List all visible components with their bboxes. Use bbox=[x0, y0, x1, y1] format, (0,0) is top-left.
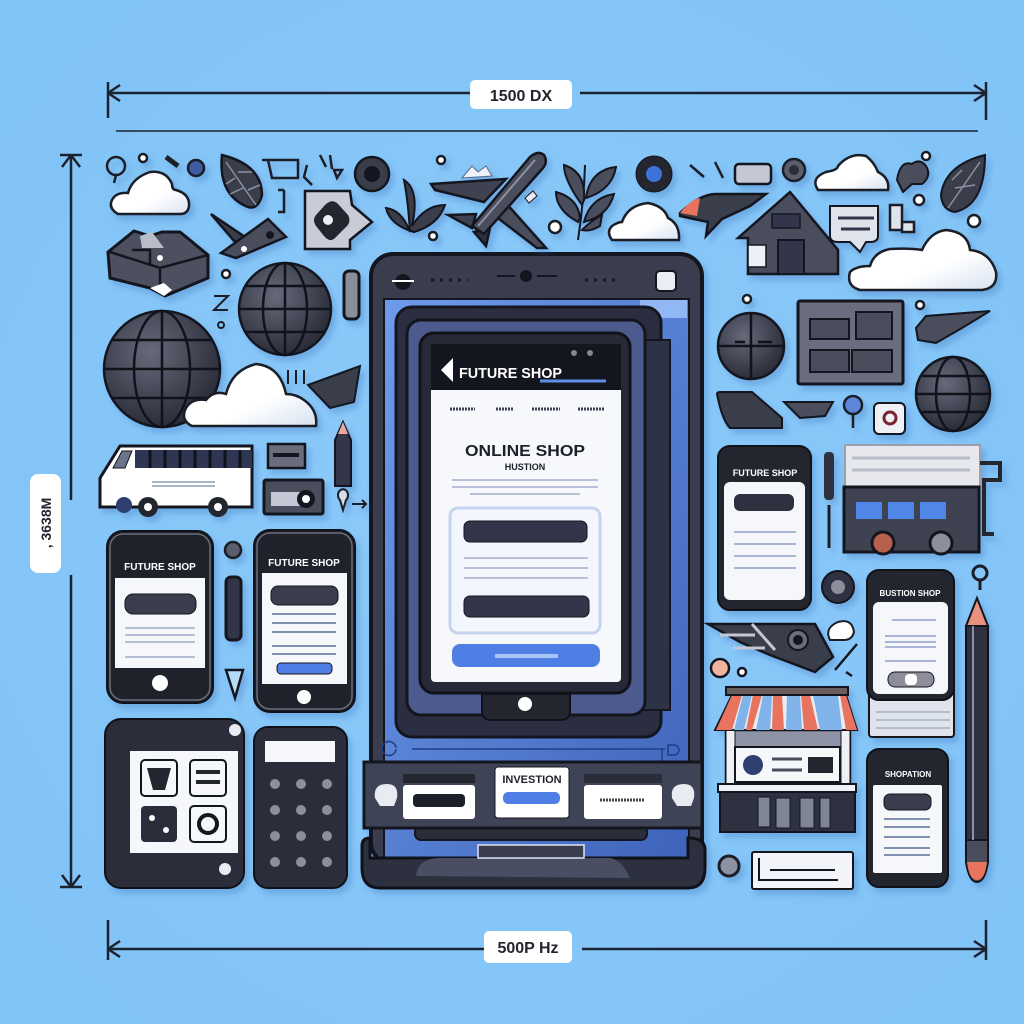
leaf bbox=[222, 155, 262, 208]
lower bracket bbox=[415, 826, 647, 840]
dimension: bottom width bbox=[108, 920, 986, 963]
phone left 2 bbox=[254, 530, 355, 712]
bus white bbox=[100, 446, 252, 517]
cloud bbox=[815, 155, 888, 190]
dimension: top width: 1500 DX bbox=[490, 88, 552, 105]
phone left 1 bbox=[107, 531, 213, 703]
dimension: top width bbox=[108, 80, 986, 131]
cloud bbox=[111, 172, 189, 214]
phone right 1: FUTURE SHOP bbox=[733, 468, 797, 478]
large cloud bbox=[849, 230, 996, 290]
bottom right card bbox=[719, 852, 853, 889]
tablet with icons bbox=[105, 719, 244, 888]
wing bbox=[916, 311, 990, 343]
3D box bbox=[108, 231, 208, 296]
phone bbox=[420, 333, 630, 693]
calculator bbox=[254, 727, 347, 888]
pill bbox=[344, 271, 359, 319]
central device bbox=[362, 254, 705, 888]
plant bbox=[386, 180, 445, 232]
shop header: FUTURE SHOP bbox=[459, 365, 562, 382]
small marker icons bbox=[107, 154, 342, 223]
bus dark bbox=[844, 445, 1000, 554]
text lines bbox=[452, 480, 598, 494]
blue button bbox=[452, 644, 600, 667]
lens icon bbox=[355, 157, 389, 191]
small dots bbox=[711, 644, 857, 677]
small bird bbox=[784, 402, 833, 418]
left middle icons bbox=[100, 263, 366, 517]
wedge bbox=[717, 392, 782, 428]
small text marks bbox=[214, 296, 304, 384]
shop header bbox=[431, 344, 621, 390]
speech sign bbox=[830, 206, 878, 252]
globe right bbox=[916, 357, 990, 431]
window panel bbox=[798, 301, 903, 384]
device screen bbox=[384, 299, 689, 859]
subheading: HUSTION bbox=[505, 462, 545, 472]
scattered dots bbox=[222, 152, 980, 309]
phone right 3: SHOPATION bbox=[885, 770, 931, 779]
device bottom bar bbox=[364, 762, 702, 828]
device bottom bar: INVESTION bbox=[502, 774, 562, 786]
wing bbox=[308, 366, 360, 408]
bird icon bbox=[680, 194, 766, 236]
misc marks bbox=[690, 159, 805, 184]
pencil small right bbox=[824, 452, 834, 548]
form panel bbox=[450, 508, 600, 633]
globe large bbox=[104, 311, 220, 427]
device base bbox=[362, 838, 705, 888]
device top bar icons bbox=[392, 270, 676, 291]
map pin box bbox=[305, 191, 372, 249]
square icon bbox=[874, 403, 905, 434]
airplane bbox=[431, 153, 546, 248]
winged camera bbox=[708, 624, 833, 672]
phone screen bbox=[431, 344, 621, 682]
top left icon row bbox=[107, 152, 996, 309]
small items between phones bbox=[225, 542, 243, 698]
pin bbox=[844, 396, 862, 428]
leaf bbox=[941, 155, 985, 212]
dimension: left height: , 3638M bbox=[38, 498, 54, 548]
tag icon bbox=[211, 214, 286, 258]
cloud bbox=[184, 364, 316, 426]
phone left 1: FUTURE SHOP bbox=[124, 562, 196, 573]
small shapes bbox=[890, 205, 914, 232]
dimension: bottom width: 500P Hz bbox=[497, 940, 559, 957]
camera card bbox=[264, 480, 323, 514]
nested tablet layers bbox=[396, 307, 661, 737]
flower icon bbox=[897, 161, 928, 192]
mountain mark bbox=[462, 166, 492, 178]
pin bbox=[973, 566, 987, 590]
phone right 2: BUSTION SHOP bbox=[880, 589, 941, 598]
tall pencil bbox=[966, 598, 988, 882]
small card bbox=[268, 444, 305, 468]
device outer frame bbox=[371, 254, 702, 864]
gear icon bbox=[822, 571, 854, 603]
phone right 1 bbox=[718, 446, 811, 610]
lens icon bbox=[636, 156, 672, 192]
cloud bbox=[609, 203, 679, 240]
pencil small bbox=[335, 422, 351, 486]
dimension: left height bbox=[30, 155, 82, 887]
small cloud bbox=[828, 621, 854, 640]
screen guide line bbox=[382, 742, 679, 762]
nav items bbox=[450, 408, 604, 410]
phone right 2 bbox=[867, 570, 954, 737]
storefront bbox=[715, 687, 857, 832]
globe small bbox=[718, 313, 784, 379]
phone left 2: FUTURE SHOP bbox=[268, 558, 340, 569]
phone right 3 bbox=[867, 749, 948, 887]
globe small bbox=[239, 263, 331, 355]
heading: ONLINE SHOP bbox=[465, 443, 585, 460]
right upper icons bbox=[717, 301, 990, 434]
pin arrow bbox=[338, 489, 366, 510]
branch bbox=[556, 165, 616, 240]
device stand bbox=[482, 694, 570, 720]
barn bbox=[738, 192, 838, 274]
